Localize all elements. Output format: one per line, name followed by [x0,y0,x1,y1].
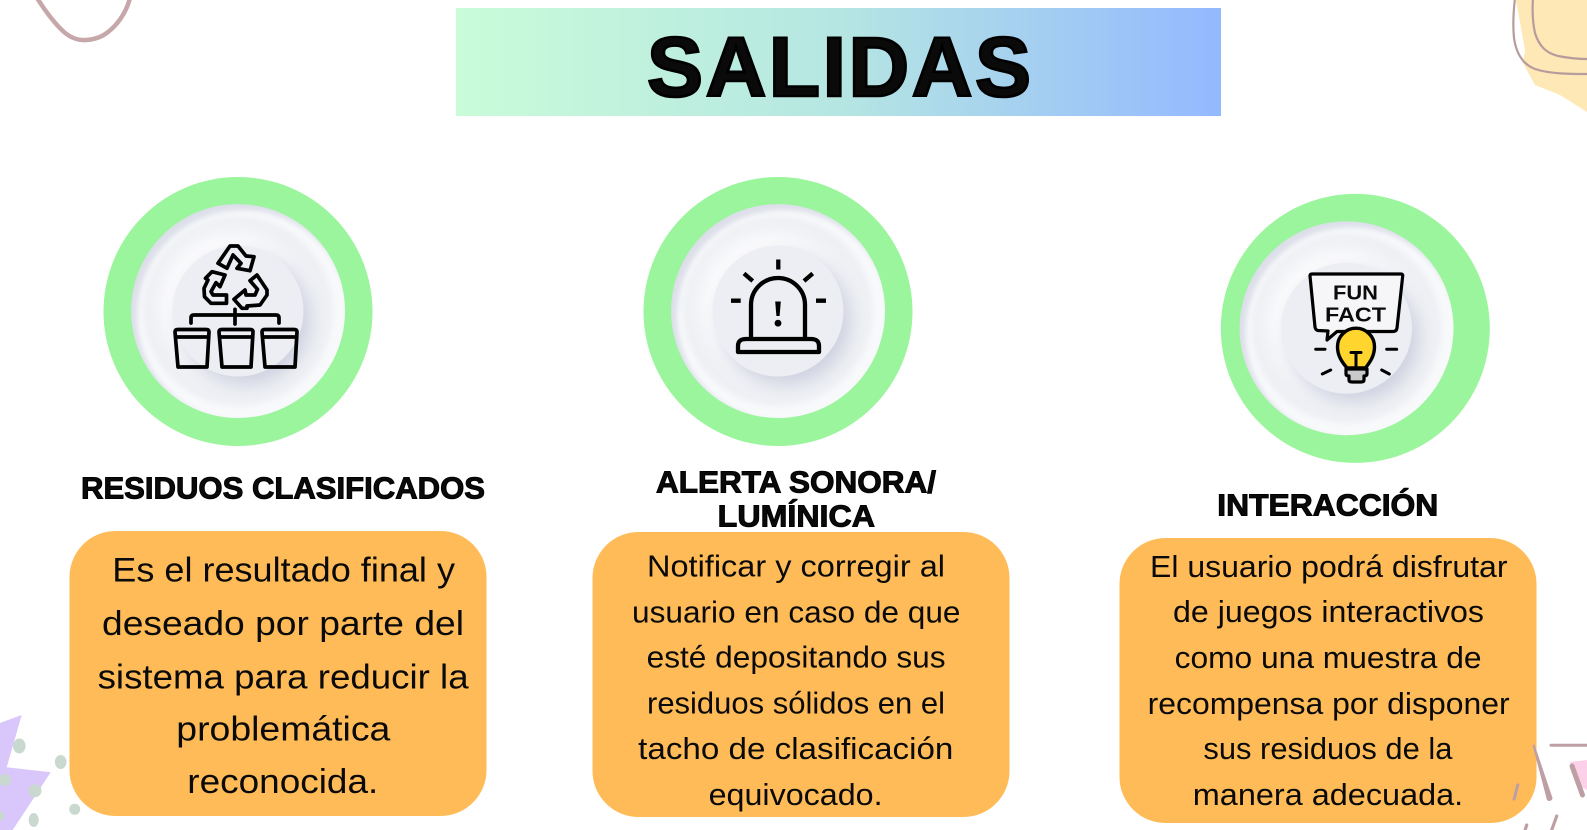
card: alerta description: tacho de clasificación [638,732,953,766]
icon ring: recycling [104,177,372,446]
decoration: bottom-right strokes [1514,744,1587,830]
card: interaccion description: recompensa por disponer [1148,687,1510,721]
heading: residuos clasificados: RESIDUOS CLASIFICADOS [81,470,485,505]
decoration: top-right blob and lines [1513,0,1587,112]
card: alerta description: esté depositando sus [647,641,946,675]
card: alerta description: equivocado. [709,778,883,812]
heading: interaccion: INTERACCIÓN [1217,487,1438,523]
decoration: top-left squiggle [37,0,130,40]
card: interaccion description: como una muestra de [1175,641,1482,675]
panel: residuos clasificados [70,177,486,816]
card: alerta description: Notificar y corregir al [647,550,945,584]
icon: siren [731,260,826,352]
card: interaccion description: sus residuos de la [1203,732,1452,766]
card: interaccion description [1120,538,1536,823]
icon ring: alarm [644,177,912,446]
card: alerta description [592,532,1010,817]
card: interaccion description: El usuario podrá disfrutar [1150,550,1508,584]
heading: alerta sonora [656,465,936,534]
title text: SALIDAS [647,20,1031,114]
card: residuos description: deseado por parte del [102,605,464,643]
heading: alerta sonora: LUMÍNICA [718,499,875,534]
icon: fun fact bubble and bulb: FACT [1325,305,1386,327]
card: alerta description: usuario en caso de que [632,595,960,629]
title banner [456,8,1221,116]
card: residuos description: Es el resultado final y [112,552,455,590]
heading: alerta sonora: ALERTA SONORA/ [656,465,936,500]
icon: fun fact bubble and bulb [1310,274,1403,382]
card: interaccion description: manera adecuada. [1193,778,1463,812]
card: residuos description: sistema para reducir la [98,658,469,696]
panel: interaccion [1120,194,1536,823]
card: residuos description: problemática [176,710,390,748]
card: alerta description: residuos sólidos en el [647,686,945,720]
decoration: bottom-left lightning and dots [0,715,80,830]
panel: alerta sonora/luminica [592,177,1010,817]
card: interaccion description: de juegos interactivos [1173,595,1484,629]
icon ring: fun fact [1221,194,1490,463]
card: residuos description [70,531,486,816]
icon: recycling bins [175,246,297,367]
card: residuos description: reconocida. [187,763,378,801]
icon: fun fact bubble and bulb: FUN [1333,282,1378,304]
